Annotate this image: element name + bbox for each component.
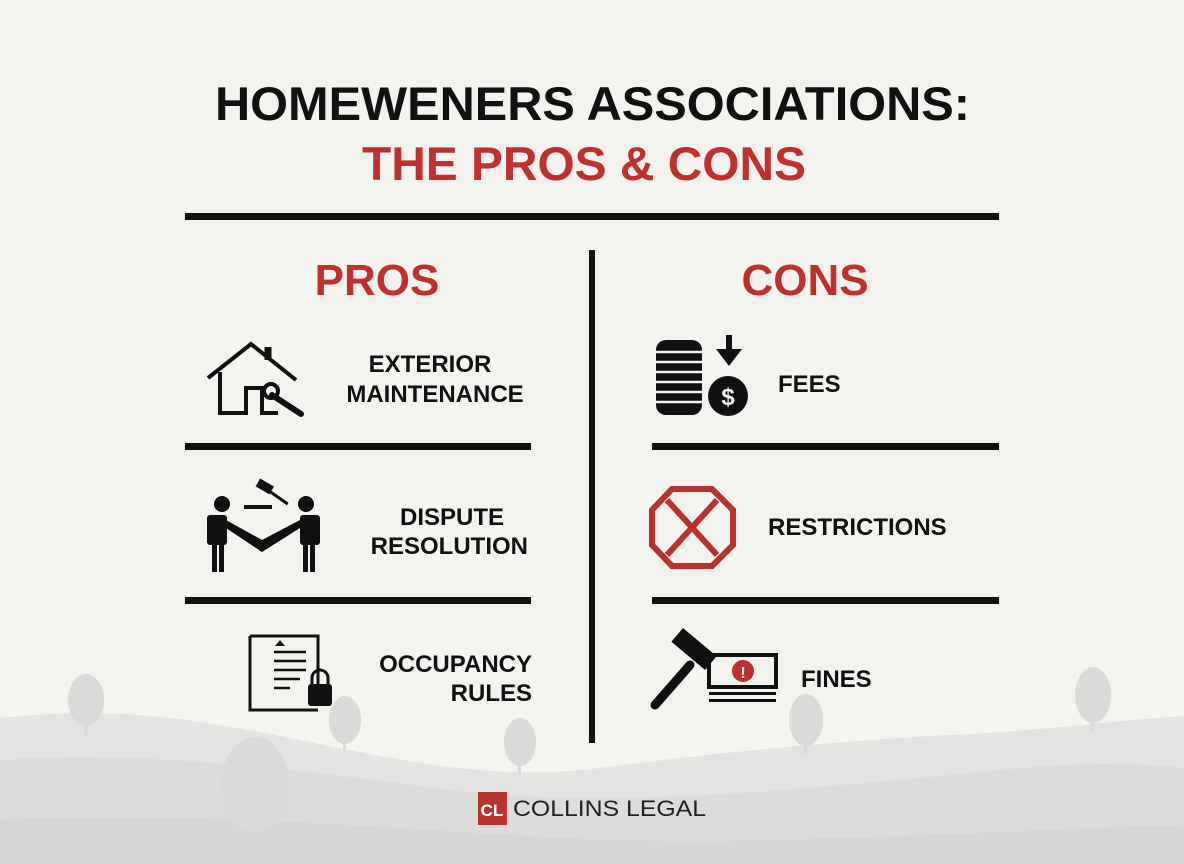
heading: cons: CONS: [741, 256, 869, 305]
logo: COLLINS LEGAL: [513, 796, 706, 821]
title: HOMEWENERS ASSOCIATIONS:: [215, 77, 970, 130]
icon: scroll with lock: [250, 636, 332, 710]
icon: gavel and money: [655, 628, 776, 705]
text: fines: FINES: [801, 666, 872, 693]
text: dispute resolution: DISPUTE: [400, 504, 504, 531]
text: exterior maintenance: MAINTENANCE: [346, 381, 524, 408]
logo: [478, 792, 706, 825]
text: exterior maintenance: EXTERIOR: [369, 351, 491, 378]
icon: handshake with gavel: [207, 479, 320, 572]
text: dispute resolution: RESOLUTION: [371, 533, 528, 560]
text: occupancy rules: RULES: [451, 680, 532, 707]
logo: CL: [481, 801, 503, 820]
icon: coins and dollar: [656, 335, 748, 416]
text: occupancy rules: [379, 651, 532, 707]
heading: pros: PROS: [315, 256, 439, 305]
title: [215, 77, 970, 190]
title: THE PROS & CONS: [362, 137, 806, 190]
icon: coins and dollar: $: [721, 384, 735, 411]
text: fees: FEES: [778, 371, 841, 398]
text: restrictions: RESTRICTIONS: [768, 514, 947, 541]
text: occupancy rules: OCCUPANCY: [379, 651, 532, 678]
background hills: [0, 667, 1184, 864]
text: exterior maintenance: [346, 351, 524, 408]
icon: house with wrench: [208, 344, 301, 414]
icon: gavel and money: !: [740, 665, 746, 682]
icon: restriction octagon: [652, 489, 733, 566]
text: dispute resolution: [371, 504, 528, 560]
